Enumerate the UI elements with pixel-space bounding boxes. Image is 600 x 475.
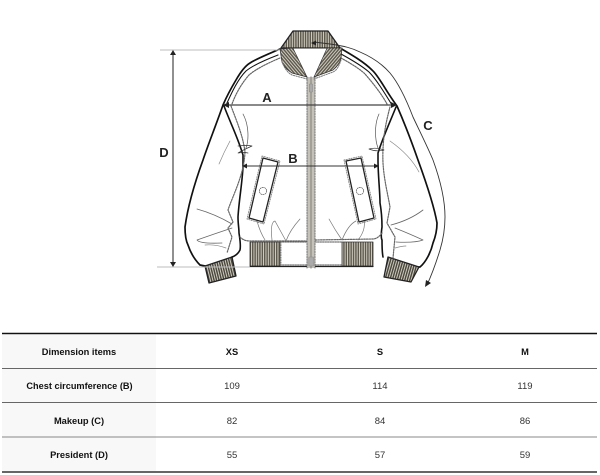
jacket: left body [224,106,307,266]
table row: chest [26,381,533,392]
table row: president: President (D) [50,450,108,460]
jacket: left hem rib [250,242,280,266]
table row: makeup: 82 [227,416,237,427]
jacket illustration [185,31,437,283]
jacket: right pocket [346,158,374,222]
table row: president: 55 [227,450,237,461]
jacket: collar [280,31,342,79]
table header row [42,347,529,357]
table row: chest: Chest circumference (B) [26,381,133,391]
table row: makeup: 84 [375,416,385,427]
jacket: zipper [307,77,315,268]
jacket: right body [315,107,396,266]
table row: president: 57 [375,450,385,461]
jacket: left cuff [205,257,236,283]
table row: president [50,450,530,461]
table row: makeup: 86 [520,416,530,427]
label D: D [159,145,169,160]
label A: A [262,90,272,105]
table header row: M [521,347,529,357]
jacket: left pocket [249,158,278,222]
jacket: right cuff [384,257,419,282]
jacket: left sleeve [185,49,280,283]
table row: chest: 114 [372,381,388,392]
table label column background [2,335,156,471]
table rules [2,334,597,472]
table row: makeup [54,416,530,427]
table header row: S [377,347,383,357]
measurement D arrow [170,50,176,267]
table row: president: 59 [520,450,530,461]
jacket: right sleeve [340,48,437,282]
size table [2,334,597,472]
guide lines [157,50,280,267]
measurement B arrow [242,164,379,168]
table header row: XS [226,347,238,357]
table row: chest: 119 [517,381,533,392]
jacket: right hem rib [342,242,373,266]
label B: B [288,151,298,166]
table header row: Dimension items [42,347,116,357]
table row: makeup: Makeup (C) [54,416,104,426]
measurement A arrow [223,102,397,108]
measurement C arrow [311,40,445,287]
table row: chest: 109 [224,381,240,392]
label C: C [423,118,433,133]
